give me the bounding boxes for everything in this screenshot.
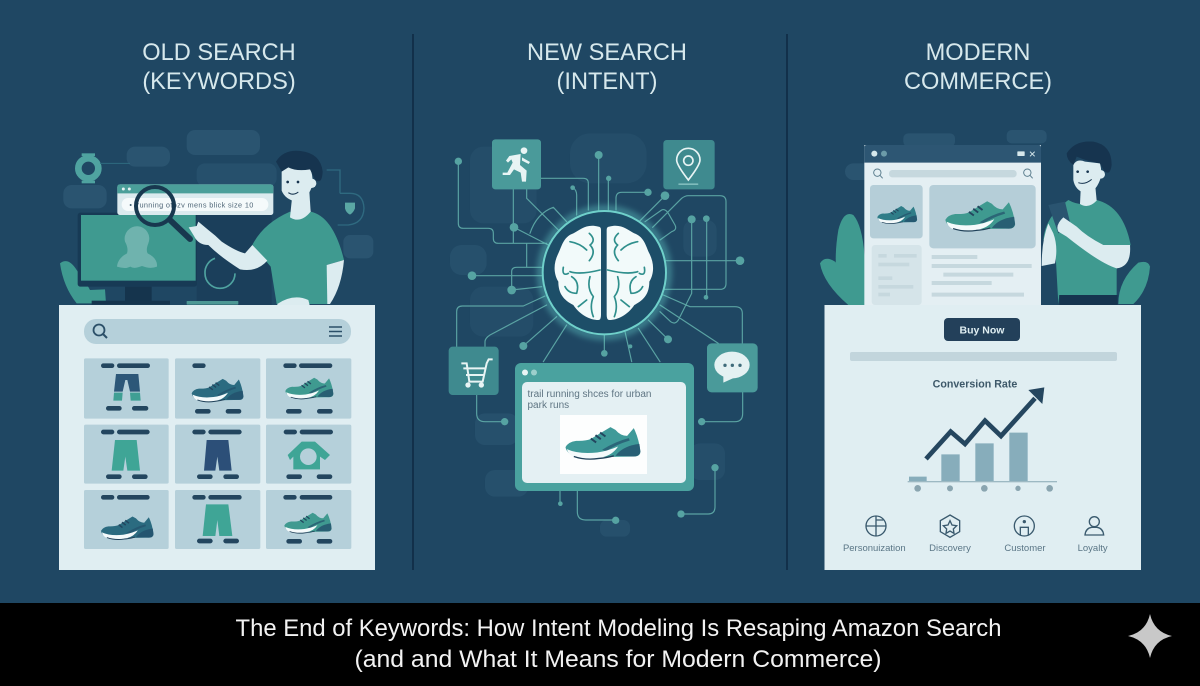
button: buy now xyxy=(944,318,1020,341)
panel: results grid xyxy=(59,305,375,570)
icon tile: location pin xyxy=(663,140,715,189)
person xyxy=(189,151,344,307)
icon: sparkle xyxy=(1128,614,1172,658)
icon tile: runner xyxy=(492,139,541,189)
icon: brain xyxy=(555,226,653,320)
illustration: person at monitor xyxy=(60,130,373,307)
brain ring xyxy=(541,209,668,336)
icon: loyalty: Loyalty xyxy=(1078,543,1108,554)
heading: new search xyxy=(527,40,687,95)
panel: conversion xyxy=(824,305,1141,570)
column: new search xyxy=(449,40,758,537)
button: buy now: Buy Now xyxy=(960,324,1005,336)
caption title xyxy=(236,615,1002,673)
icon: discovery xyxy=(929,515,971,554)
query text: trail running shces for urban xyxy=(528,389,651,400)
circuit lines xyxy=(457,155,742,362)
icon: shield node xyxy=(327,170,364,225)
circuit nodes xyxy=(455,151,744,524)
divider right xyxy=(786,34,788,570)
leaf xyxy=(60,261,106,303)
heading: new search: NEW SEARCH xyxy=(527,40,687,66)
heading: modern commerce: COMMERCE) xyxy=(904,69,1052,95)
caption band xyxy=(0,603,1200,686)
chart: conversion rate xyxy=(908,378,1057,492)
benefit icons xyxy=(843,515,1108,554)
result window: park runs xyxy=(528,400,569,411)
heading: old search xyxy=(142,40,296,95)
search bar xyxy=(84,319,351,344)
icon tile: cart xyxy=(449,347,499,395)
column: modern commerce xyxy=(820,40,1150,570)
monitor xyxy=(78,213,197,305)
heading: new search: (INTENT) xyxy=(557,69,657,95)
icon: gear xyxy=(78,153,130,183)
caption title: (and and What It Means for Modern Commerce) xyxy=(354,646,882,673)
product tiles xyxy=(84,358,351,549)
shoe image xyxy=(560,415,647,474)
keyboard xyxy=(187,301,238,305)
icon: loop arrows xyxy=(205,258,235,288)
divider left xyxy=(412,34,414,570)
heading: old search: (KEYWORDS) xyxy=(142,69,296,95)
icon: magnifying glass xyxy=(136,187,190,239)
column: old search xyxy=(59,40,375,570)
product window xyxy=(864,145,1041,305)
progress bar xyxy=(850,352,1117,361)
search window xyxy=(117,184,273,215)
person with phone xyxy=(1042,141,1131,305)
heading: old search: OLD SEARCH xyxy=(142,40,296,66)
icon: personalization xyxy=(843,516,906,554)
icon: customer xyxy=(1004,516,1046,554)
icon: loyalty xyxy=(1078,517,1108,554)
result window xyxy=(515,363,694,491)
heading: modern commerce: MODERN xyxy=(926,40,1030,66)
caption title: The End of Keywords: How Intent Modeling Is Resaping Amazon Search xyxy=(236,615,1002,642)
neural network diagram xyxy=(449,133,758,537)
icon tile: chat xyxy=(707,343,758,392)
illustration: shopper with product page xyxy=(820,130,1150,305)
search query text: running otozv mens blick size 10 xyxy=(137,200,253,209)
leaves xyxy=(820,214,1150,305)
heading: modern commerce xyxy=(904,40,1052,95)
icon: customer: Customer xyxy=(1004,543,1046,554)
icon: personalization: Personuization xyxy=(843,543,906,554)
icon: discovery: Discovery xyxy=(929,543,971,554)
chart: conversion rate: Conversion Rate xyxy=(933,378,1017,390)
